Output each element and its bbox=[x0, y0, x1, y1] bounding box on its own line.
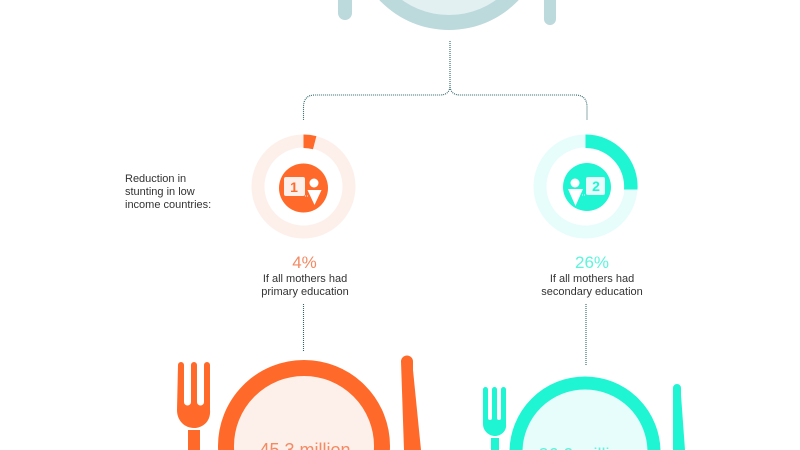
icon: teal fork bbox=[483, 387, 506, 436]
icon: primary education: 1 bbox=[290, 179, 298, 195]
stat: 4% primary education bbox=[261, 253, 349, 298]
icon: orange fork bbox=[177, 362, 210, 428]
stat: 26% secondary education: If all mothers had bbox=[550, 273, 634, 285]
stat: 4% primary education: If all mothers had bbox=[263, 273, 347, 285]
stat: 26% secondary education: secondary education bbox=[541, 286, 643, 298]
icon: orange fork stem bbox=[188, 430, 200, 450]
icon: orange knife bbox=[401, 356, 421, 450]
stat: 4% primary education: 4% bbox=[292, 253, 317, 272]
teal place setting bbox=[483, 383, 685, 450]
row label: Reduction in bbox=[125, 173, 186, 185]
dotted connector: right bbox=[585, 304, 587, 366]
orange place setting bbox=[177, 356, 421, 450]
row label: income countries: bbox=[125, 199, 211, 211]
row label: stunting in low bbox=[125, 186, 195, 198]
stat: 4% primary education: primary education bbox=[261, 286, 349, 298]
donut: secondary education 26% bbox=[540, 134, 638, 232]
dotted connector: left bbox=[302, 304, 304, 352]
stat: 26% secondary education bbox=[541, 253, 643, 298]
icon: teal knife bbox=[673, 384, 685, 450]
icon: teal fork stem bbox=[491, 438, 499, 450]
top place setting bbox=[338, 0, 556, 30]
branching dotted connector bbox=[304, 41, 587, 120]
donut: primary education 4% bbox=[258, 134, 349, 232]
stat: 26% secondary education: 26% bbox=[575, 253, 609, 272]
icon: secondary education: 2 bbox=[592, 178, 600, 194]
